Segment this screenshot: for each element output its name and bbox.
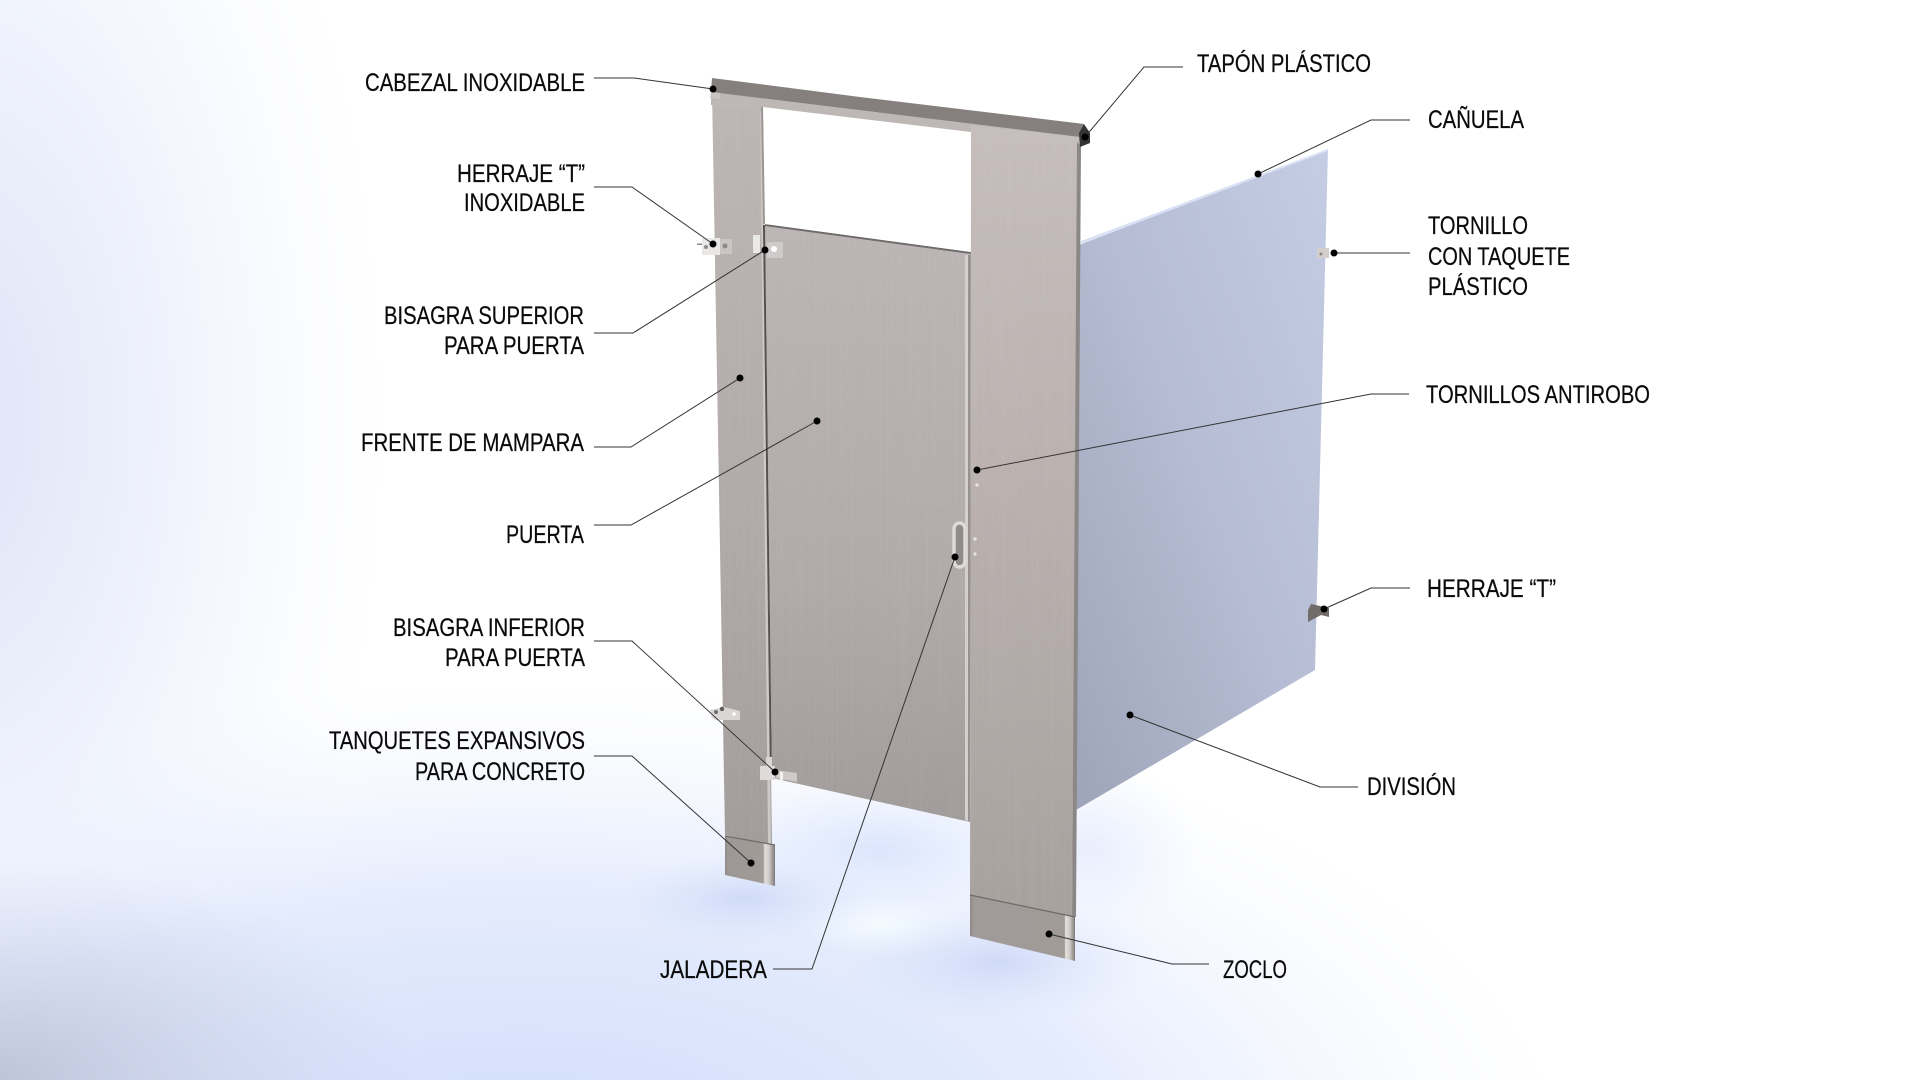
top rail under header	[711, 92, 1080, 150]
label: tanquetes expansivos: TANQUETES EXPANSIVOS	[329, 727, 585, 755]
label: bisagra superior: BISAGRA SUPERIOR	[384, 302, 584, 330]
anti-theft screws	[973, 483, 979, 556]
label: bisagra superior	[384, 246, 768, 360]
label: zoclo: ZOCLO	[1223, 956, 1287, 984]
label: frente de mampara: FRENTE DE MAMPARA	[361, 429, 584, 457]
division panel	[1076, 149, 1328, 810]
right base shoe	[970, 895, 1075, 961]
label: division: DIVISIÓN	[1367, 772, 1456, 801]
label: herraje T inoxidable	[457, 160, 716, 248]
brushed metal texture	[700, 80, 1090, 930]
left window jamb	[762, 107, 764, 224]
label: herraje T: HERRAJE “T”	[1427, 575, 1556, 603]
header rail	[710, 78, 1084, 137]
label: cabezal inoxidable: CABEZAL INOXIDABLE	[365, 69, 585, 97]
label: herraje T	[1320, 575, 1556, 612]
label: puerta	[506, 418, 820, 549]
label: herraje T inoxidable: HERRAJE “T”	[457, 160, 585, 188]
division screw bracket	[1317, 248, 1329, 258]
label: canuela	[1254, 105, 1524, 178]
label: tornillos antirobo: TORNILLOS ANTIROBO	[1426, 381, 1650, 409]
label: tanquetes expansivos: PARA CONCRETO	[415, 758, 585, 786]
door	[764, 225, 971, 822]
label: puerta: PUERTA	[506, 521, 584, 549]
lower hinge	[760, 757, 797, 782]
label: bisagra inferior: BISAGRA INFERIOR	[393, 614, 585, 642]
label: bisagra superior: PARA PUERTA	[444, 332, 584, 360]
label: tapon plastico: TAPÓN PLÁSTICO	[1197, 49, 1371, 78]
label: division	[1126, 712, 1456, 801]
label: bisagra inferior: PARA PUERTA	[445, 644, 585, 672]
label: bisagra inferior	[393, 614, 778, 776]
label: tornillo con taquete plastico	[1330, 212, 1570, 301]
label: tornillo con taquete plastico: TORNILLO	[1428, 212, 1528, 240]
top T bracket	[697, 238, 732, 255]
label: jaladera	[660, 554, 958, 984]
door handle	[954, 523, 965, 567]
plastic cap	[1079, 124, 1090, 147]
label: canuela: CAÑUELA	[1428, 105, 1524, 134]
label: jaladera: JALADERA	[660, 956, 767, 984]
label: herraje T inoxidable: INOXIDABLE	[464, 189, 585, 217]
label: tanquetes expansivos	[329, 727, 754, 866]
lower T bracket	[710, 707, 740, 720]
label: tornillos antirobo	[974, 381, 1650, 474]
left base shoe	[725, 836, 775, 886]
top hinge	[753, 235, 783, 258]
front panel left pilaster	[712, 90, 772, 845]
label: tornillo con taquete plastico: PLÁSTICO	[1428, 272, 1528, 301]
label: tornillo con taquete plastico: CON TAQUETE	[1428, 243, 1570, 271]
front panel right pilaster	[970, 125, 1081, 918]
label: zoclo	[1046, 930, 1287, 984]
label: frente de mampara	[361, 374, 744, 457]
window opening	[763, 107, 971, 252]
label: tapon plastico	[1082, 49, 1371, 140]
lower T bracket on division	[1308, 604, 1329, 622]
